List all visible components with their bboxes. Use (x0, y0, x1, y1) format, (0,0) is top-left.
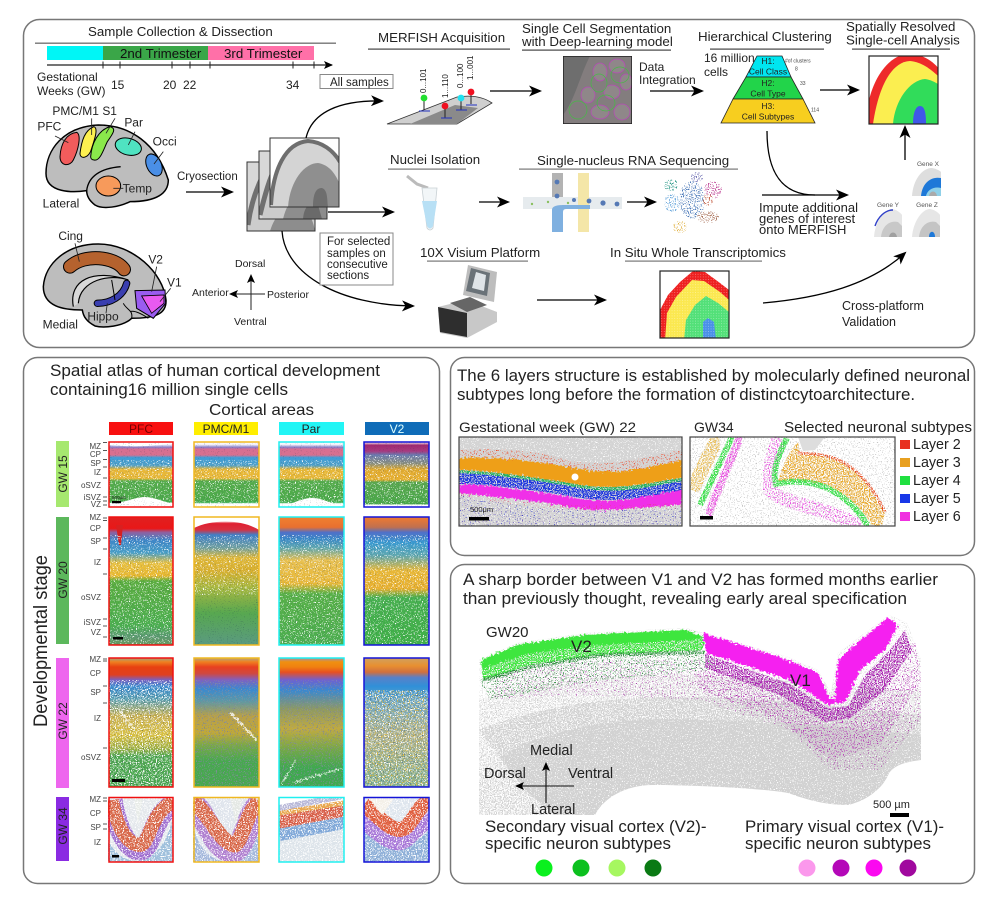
legend: neuronal layers: Layer 2 (913, 437, 961, 453)
arrow: to sequencing (479, 201, 508, 203)
diagram: lateral brain regions: PMC/M1 (52, 104, 99, 118)
zone labels: iSVZ (84, 618, 101, 627)
diagram: gene Y map (874, 202, 902, 237)
label: cross-platform validation: Validation (842, 315, 896, 329)
heading: single cell segmentation: Single Cell Segmentation (522, 21, 671, 36)
zone labels: SP (90, 537, 101, 546)
zone labels: CP (90, 809, 101, 818)
zone labels: CP (90, 524, 101, 533)
heading: spatially resolved analysis: Single-cell Analysis (846, 32, 960, 48)
image: V1 V2 tissue section: V2 (571, 637, 592, 656)
legend: neuronal layers: Layer 4 (913, 473, 961, 489)
zone labels (81, 442, 107, 847)
panel: spatial atlas (24, 358, 440, 884)
legend: V1 subtypes: Primary visual cortex (V1)- (745, 817, 944, 836)
heading: nuclei isolation: Nuclei Isolation (390, 152, 480, 167)
arrow: to Visium (282, 231, 413, 306)
diagram: lateral brain regions: S1 (102, 104, 117, 118)
arrow: to whole transcriptomics (537, 299, 605, 301)
heading: cortical areas: Cortical areas (209, 402, 314, 419)
zone labels: iSVZ (84, 493, 101, 502)
diagram: MERFISH imaging barcodes: 0...101 (419, 68, 428, 93)
image: GW34 layers (690, 419, 895, 526)
text: impute genes: Impute additional (759, 200, 858, 215)
diagram: microfluidic droplet chip (523, 173, 622, 232)
diagram: clustering pyramid: Cell Type (750, 88, 786, 98)
stage bars (56, 441, 70, 861)
diagram: MERFISH imaging barcodes: 0...100 (456, 63, 465, 88)
diagram: medial brain regions: V1 (167, 276, 182, 290)
image: V1 V2 tissue section (479, 610, 924, 820)
zone labels: MZ (89, 513, 101, 522)
diagram: medial brain regions: Hippo (87, 310, 119, 324)
compass: anatomical axes: Dorsal (235, 258, 265, 270)
zone labels: SP (90, 459, 101, 468)
heading: border finding: than previously thought, revealing early areal specification (463, 590, 907, 608)
legend: V1 subtypes: specific neuron subtypes (745, 834, 931, 853)
legend: V2 subtypes: Secondary visual cortex (V2)- (485, 817, 707, 836)
diagram: clustering pyramid: H2: (761, 78, 775, 88)
legend: neuronal layers: Selected neuronal subtypes (784, 420, 972, 436)
legend: neuronal layers (784, 420, 972, 525)
arrow: cross-platform validation (763, 253, 905, 303)
compass: anatomical axes: Posterior (267, 289, 310, 301)
arrow: imputation curve (767, 131, 847, 195)
tissue grid: GW20 row (109, 517, 429, 645)
heading: border finding: A sharp border between V1 and V2 has formed months earlier (463, 571, 939, 589)
scale bar: 500 um (873, 799, 910, 817)
zone labels: MZ (89, 655, 101, 664)
diagram: clustering pyramid: 114 (811, 108, 819, 114)
zone labels: IZ (94, 838, 101, 847)
legend: neuronal layers: Layer 5 (913, 491, 961, 507)
text: impute genes: genes of interest (759, 211, 856, 226)
arrow: to MERFISH (306, 101, 382, 138)
heading: layers finding: The 6 layers structure is established by molecularly defined neuronal (457, 367, 970, 385)
diagram: clustering pyramid: 33 (800, 81, 806, 87)
image: V1 V2 tissue section: GW20 (486, 624, 529, 641)
chart: snRNA-seq cell clusters (664, 172, 722, 233)
diagram: Visium spot map (660, 271, 729, 340)
diagram: lateral brain regions: Occi (153, 134, 177, 148)
image: GW22 layers: 500μm (470, 505, 493, 514)
legend: V2 subtypes: specific neuron subtypes (485, 834, 671, 853)
zone labels: VZ (91, 628, 101, 637)
diagram: spatial cell type map (869, 54, 940, 124)
gestational week axis: 34 (286, 78, 300, 92)
diagram: gene Y map: Gene Y (877, 202, 900, 209)
heading: spatial atlas: Spatial atlas of human cortical development (50, 362, 380, 380)
label: data integration: Data (639, 60, 665, 74)
text: impute genes: onto MERFISH (759, 222, 846, 237)
panel: workflow overview (24, 20, 974, 348)
callout: selected samples: consecutive (327, 259, 388, 271)
diagram: clustering pyramid: #of clusters (785, 58, 811, 64)
diagram: gene X map: Gene X (917, 161, 940, 168)
gestational week axis: 22 (183, 78, 197, 92)
arrow: to clusters (627, 201, 655, 203)
heading: spatially resolved analysis: Spatially Resolved (846, 19, 955, 34)
legend: V2 subtypes (485, 817, 707, 876)
text: impute genes (759, 200, 858, 237)
zone labels: oSVZ (81, 753, 101, 762)
stage bars: GW 20 (56, 561, 70, 599)
icon: Visium instrument (438, 265, 497, 338)
heading: spatial atlas (50, 362, 380, 399)
heading: spatial atlas: containing16 million single cells (50, 381, 288, 399)
diagram: gene X map (912, 162, 941, 196)
trimester timeline bar (47, 46, 314, 61)
tissue grid: GW34 row (108, 796, 429, 862)
heading: spatially resolved analysis (846, 19, 960, 50)
compass: tissue orientation: Dorsal (484, 766, 526, 782)
arrow: to nuclei isolation (328, 211, 393, 213)
zone labels: VZ (91, 500, 101, 509)
diagram: clustering pyramid: Cell Class (749, 66, 787, 76)
zone labels: MZ (89, 795, 101, 804)
diagram: clustering pyramid: H3: (761, 101, 775, 111)
arrow: cryosection (177, 171, 238, 192)
diagram: clustering pyramid: 8 (795, 66, 798, 72)
zone labels: SP (90, 688, 101, 697)
panel: V1 V2 border (450, 564, 974, 884)
scale bar: 500 um: 500 µm (873, 799, 910, 811)
heading: hierarchical clustering: Hierarchical Clustering (698, 29, 832, 44)
compass: tissue orientation: Medial (530, 743, 573, 759)
diagram: MERFISH imaging barcodes: 1...110 (441, 74, 450, 98)
zone labels: CP (90, 669, 101, 678)
diagram: clustering pyramid: Cell Subtypes (742, 112, 794, 122)
tissue grid: GW15 row (109, 442, 429, 507)
gestational week axis: 15 (111, 78, 125, 92)
diagram: medial brain regions: Medial (43, 317, 78, 331)
stage bars: GW 15 (56, 455, 70, 493)
diagram: medial brain regions: Cing (58, 229, 83, 243)
stage bars: GW 22 (56, 702, 70, 740)
image: segmented cells (563, 56, 632, 124)
diagram: gene Z map (912, 202, 940, 237)
label: cross-platform validation (842, 299, 924, 329)
callout: selected samples: For selected (327, 236, 390, 248)
column headers: cortical areas (109, 422, 429, 436)
heading: single cell segmentation: with Deep-learning model (521, 34, 673, 49)
image: GW22 layers (459, 419, 682, 526)
zone labels: oSVZ (81, 481, 101, 490)
icon: stacked tissue sections (247, 138, 340, 231)
diagram: MERFISH imaging barcodes (387, 55, 492, 124)
icon: microcentrifuge tube (407, 176, 437, 230)
diagram: lateral brain regions (37, 104, 177, 211)
compass: anatomical axes: Anterior (192, 287, 229, 299)
diagram: MERFISH imaging barcodes: 1...001 (466, 55, 475, 80)
diagram: lateral brain regions: PFC (37, 120, 62, 134)
arrow: to segmentation (490, 90, 540, 92)
heading: single-nucleus RNA sequencing: Single-nucleus RNA Sequencing (537, 153, 729, 168)
zone labels: SP (90, 823, 101, 832)
compass: tissue orientation (484, 743, 613, 818)
diagram: clustering pyramid: cells (704, 65, 728, 79)
diagram: gene Z map: Gene Z (916, 202, 938, 209)
callout: selected samples: sections (327, 270, 369, 282)
diagram: lateral brain regions: Temp (123, 181, 152, 195)
diagram: medial brain regions: V2 (148, 253, 163, 267)
callout: all samples: All samples (330, 77, 389, 89)
column headers: cortical areas: PFC (129, 422, 153, 436)
gestational week axis: 20 (163, 78, 177, 92)
arrow: cryosection: Cryosection (177, 171, 238, 183)
diagram: lateral brain regions: Par (124, 116, 143, 130)
compass: anatomical axes (192, 258, 310, 328)
heading: MERFISH acquisition: MERFISH Acquisition (378, 30, 505, 45)
diagram: clustering pyramid: 16 million (704, 51, 755, 65)
column headers: cortical areas: Par (302, 422, 320, 436)
zone labels: CP (90, 450, 101, 459)
diagram: clustering pyramid: H1: (761, 56, 775, 66)
legend: neuronal layers: Layer 6 (913, 509, 961, 525)
compass: tissue orientation: Ventral (568, 766, 613, 782)
label: cross-platform validation: Cross-platform (842, 299, 924, 313)
heading: 10X Visium: 10X Visium Platform (420, 245, 540, 260)
zone labels: IZ (94, 468, 101, 477)
arrow: up to spatial analysis (904, 127, 906, 160)
arrow: to spatial analysis (820, 89, 858, 91)
tissue grid: GW15 row: 500μm (112, 495, 126, 500)
callout: all samples (320, 74, 393, 89)
stage bars: GW 34 (56, 807, 70, 845)
zone labels: IZ (94, 558, 101, 567)
legend: neuronal layers: Layer 3 (913, 455, 961, 471)
heading: sample collection: Sample Collection & Dissection (88, 24, 273, 39)
diagram: lateral brain regions: Lateral (43, 197, 79, 211)
image: V1 V2 tissue section: V1 (790, 671, 811, 690)
label: data integration (639, 60, 702, 91)
gestational week axis (37, 62, 332, 98)
zone labels: oSVZ (81, 593, 101, 602)
callout: selected samples: samples on (327, 248, 386, 260)
gestational week axis: Gestational (37, 70, 98, 84)
heading: layers finding: subtypes long before the formation of distinctcytoarchitecture. (457, 386, 915, 404)
column headers: cortical areas: PMC/M1 (203, 422, 250, 436)
legend: V1 subtypes (745, 817, 944, 876)
compass: anatomical axes: Ventral (234, 316, 267, 328)
trimester timeline bar: 3rd Trimester (224, 46, 303, 61)
label: data integration: Integration (639, 73, 696, 87)
tissue grid: GW22 row (109, 658, 429, 787)
heading: in situ whole transcriptomics: In Situ Whole Transcriptomics (610, 245, 786, 260)
diagram: clustering pyramid (704, 51, 819, 123)
label: developmental stage: Developmental stage (30, 555, 52, 727)
column headers: cortical areas: V2 (390, 422, 405, 436)
image: GW22 layers: Gestational week (GW) 22 (459, 419, 636, 435)
panel: six-layer structure (450, 358, 974, 556)
heading: border finding (463, 571, 939, 608)
compass: tissue orientation: Lateral (531, 802, 575, 818)
heading: single cell segmentation (521, 21, 673, 51)
zone labels: IZ (94, 714, 101, 723)
gestational week axis: Weeks (GW) (37, 84, 105, 98)
callout: selected samples (320, 233, 393, 285)
zone labels: MZ (89, 442, 101, 451)
diagram: medial brain regions (43, 229, 182, 331)
image: GW34 layers: GW34 (694, 419, 734, 435)
trimester timeline bar: 2nd Trimester (120, 46, 202, 61)
heading: layers finding (457, 367, 970, 404)
line: imputation baseline (762, 194, 815, 196)
